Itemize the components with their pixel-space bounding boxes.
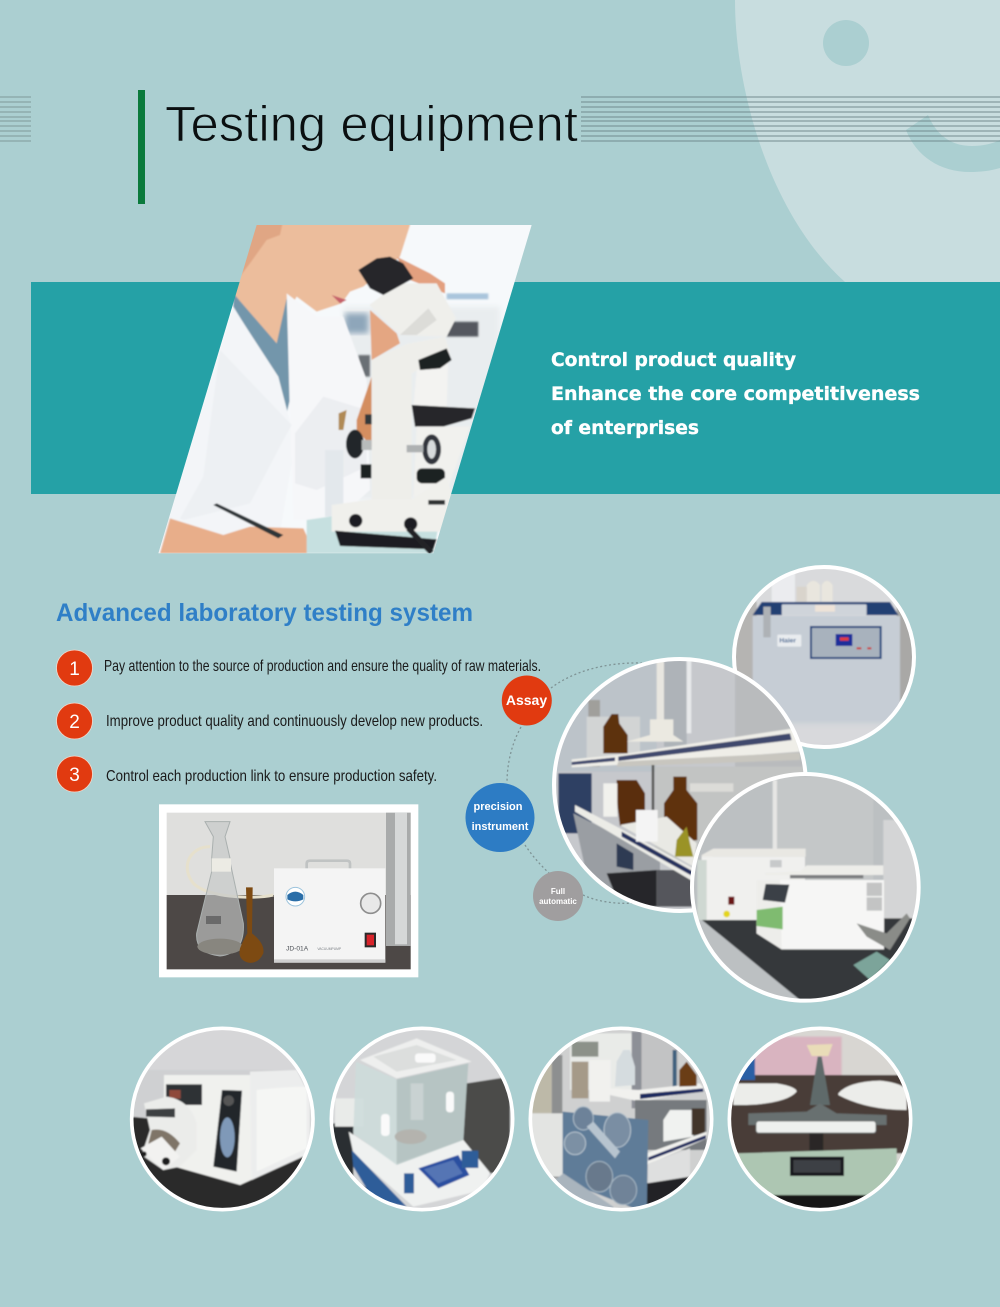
list item 3 bbox=[56, 756, 437, 792]
photo circle: freezer: Haier bbox=[779, 637, 796, 644]
list item 3: Control each production link to ensure production safety. bbox=[106, 768, 437, 785]
photo circle: freezer bbox=[733, 567, 917, 748]
header stripes bbox=[0, 97, 1000, 141]
bubble: precision instrument bbox=[466, 783, 534, 852]
framed photo: vacuum pump: VACUUMPUMP bbox=[317, 947, 342, 951]
decorative background shapes bbox=[735, 0, 1000, 282]
banner photo: scientist at microscope bbox=[150, 220, 540, 560]
photo circle: mechanical balance bbox=[728, 1027, 915, 1215]
framed photo: vacuum pump bbox=[159, 804, 418, 977]
bubble: Full automatic bbox=[533, 871, 583, 921]
list item 1: 1 bbox=[69, 659, 80, 680]
accent bar bbox=[138, 90, 145, 204]
photo circle: glassware rack bbox=[528, 1027, 715, 1213]
banner band bbox=[31, 282, 1000, 494]
photo circle: analytical balance bbox=[330, 1027, 517, 1213]
list item 2: Improve product quality and continuously develop new products. bbox=[106, 713, 483, 730]
title: Testing equipment bbox=[165, 96, 578, 152]
banner text bbox=[551, 349, 920, 439]
bubble: Assay bbox=[502, 676, 552, 726]
bubble: precision instrument: instrument bbox=[472, 821, 529, 833]
bubble: Full automatic: automatic bbox=[539, 897, 577, 906]
banner text: Control product quality bbox=[551, 349, 797, 371]
list item 1: Pay attention to the source of production and ensure the quality of raw materials. bbox=[104, 658, 541, 675]
photo circle: peristaltic pump bbox=[130, 1027, 317, 1213]
bubble: Full automatic: Full bbox=[551, 887, 565, 896]
list item 3: 3 bbox=[69, 765, 80, 786]
framed photo: vacuum pump: JD-01A bbox=[286, 946, 309, 953]
banner text: of enterprises bbox=[551, 417, 699, 439]
list item 2: 2 bbox=[69, 712, 80, 733]
bubble: Assay: Assay bbox=[506, 692, 547, 708]
list item 1 bbox=[56, 650, 541, 686]
photo circle: laboratory shelves bbox=[553, 658, 807, 912]
banner text: Enhance the core competitiveness bbox=[551, 383, 920, 405]
bubble: precision instrument: precision bbox=[474, 801, 523, 813]
photo circle: centrifuges bbox=[690, 773, 920, 1003]
list item 2 bbox=[56, 703, 483, 739]
section heading: Advanced laboratory testing system bbox=[56, 599, 473, 627]
dotted connector bbox=[507, 663, 642, 903]
